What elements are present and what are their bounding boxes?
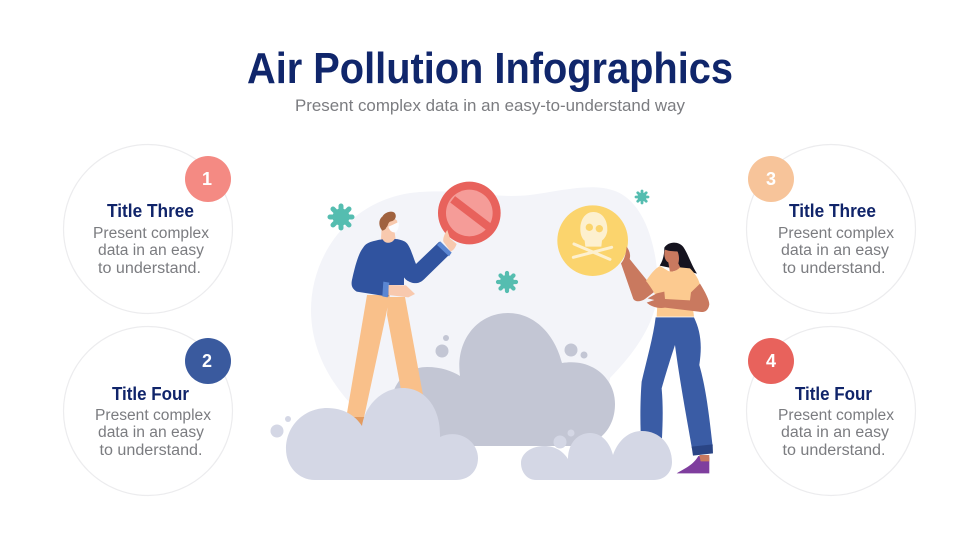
panel: item 3 (746, 144, 916, 314)
subtitle: Present complex data in an easy-to-understand way (295, 96, 685, 115)
icon: virus center (498, 273, 516, 291)
text block: item 4: to understand. (782, 442, 886, 459)
person: man with prohibition sign (347, 182, 501, 427)
front right cloud (521, 430, 672, 480)
heading: item 1: Title Three (107, 201, 194, 221)
icon: virus right (636, 191, 648, 203)
text block: item 4 (778, 407, 894, 459)
badge 1 (185, 156, 231, 202)
text block: item 1: to understand. (98, 260, 201, 277)
badge 4 (748, 338, 794, 384)
text block: item 4: data in an easy (781, 424, 889, 441)
panel: item 1 (64, 144, 232, 314)
title: Air Pollution Infographics (247, 44, 733, 93)
text block: item 3 (778, 225, 894, 277)
skull sign (557, 205, 628, 276)
man's sweater (352, 239, 451, 297)
badge 2 (185, 338, 231, 384)
text block: item 3: to understand. (782, 260, 886, 277)
woman's shirt (646, 266, 700, 317)
background blob (311, 187, 658, 446)
badge 3: 3 (766, 169, 776, 189)
badge 3 (748, 156, 794, 202)
text block: item 4: Present complex (778, 407, 894, 424)
sign (438, 182, 501, 252)
woman's jeans (640, 317, 713, 473)
badge 1: 1 (202, 169, 212, 189)
woman's shoe (677, 456, 709, 473)
text block: item 1 (93, 225, 209, 277)
badge 4: 4 (766, 351, 776, 371)
heading: item 3: Title Three (789, 201, 876, 221)
heading: item 4: Title Four (795, 384, 872, 404)
man's legs (347, 295, 423, 427)
front left cloud (270, 388, 478, 480)
woman's face and neck (664, 250, 681, 272)
man's neck and head (379, 212, 399, 243)
heading: item 2: Title Four (112, 384, 189, 404)
badge 2: 2 (202, 351, 212, 371)
text block: item 2: data in an easy (98, 424, 204, 441)
panel: item 2 (64, 326, 232, 496)
man's cuffs (382, 241, 452, 297)
panel: item 4 (746, 326, 916, 496)
back cloud (391, 313, 615, 446)
text block: item 1: Present complex (93, 225, 209, 242)
person: woman with skull sign (621, 243, 713, 473)
woman's folded arm (647, 284, 709, 312)
icon: virus left (330, 206, 352, 228)
text block: item 1: data in an easy (98, 242, 204, 259)
text block: item 2: Present complex (95, 407, 211, 424)
text block: item 3: data in an easy (781, 242, 889, 259)
text block: item 2 (95, 407, 211, 459)
text block: item 3: Present complex (778, 225, 894, 242)
woman's hair (660, 243, 697, 274)
text block: item 2: to understand. (100, 442, 202, 459)
woman's raised arm (621, 247, 657, 301)
man's hand on hip (388, 285, 415, 297)
